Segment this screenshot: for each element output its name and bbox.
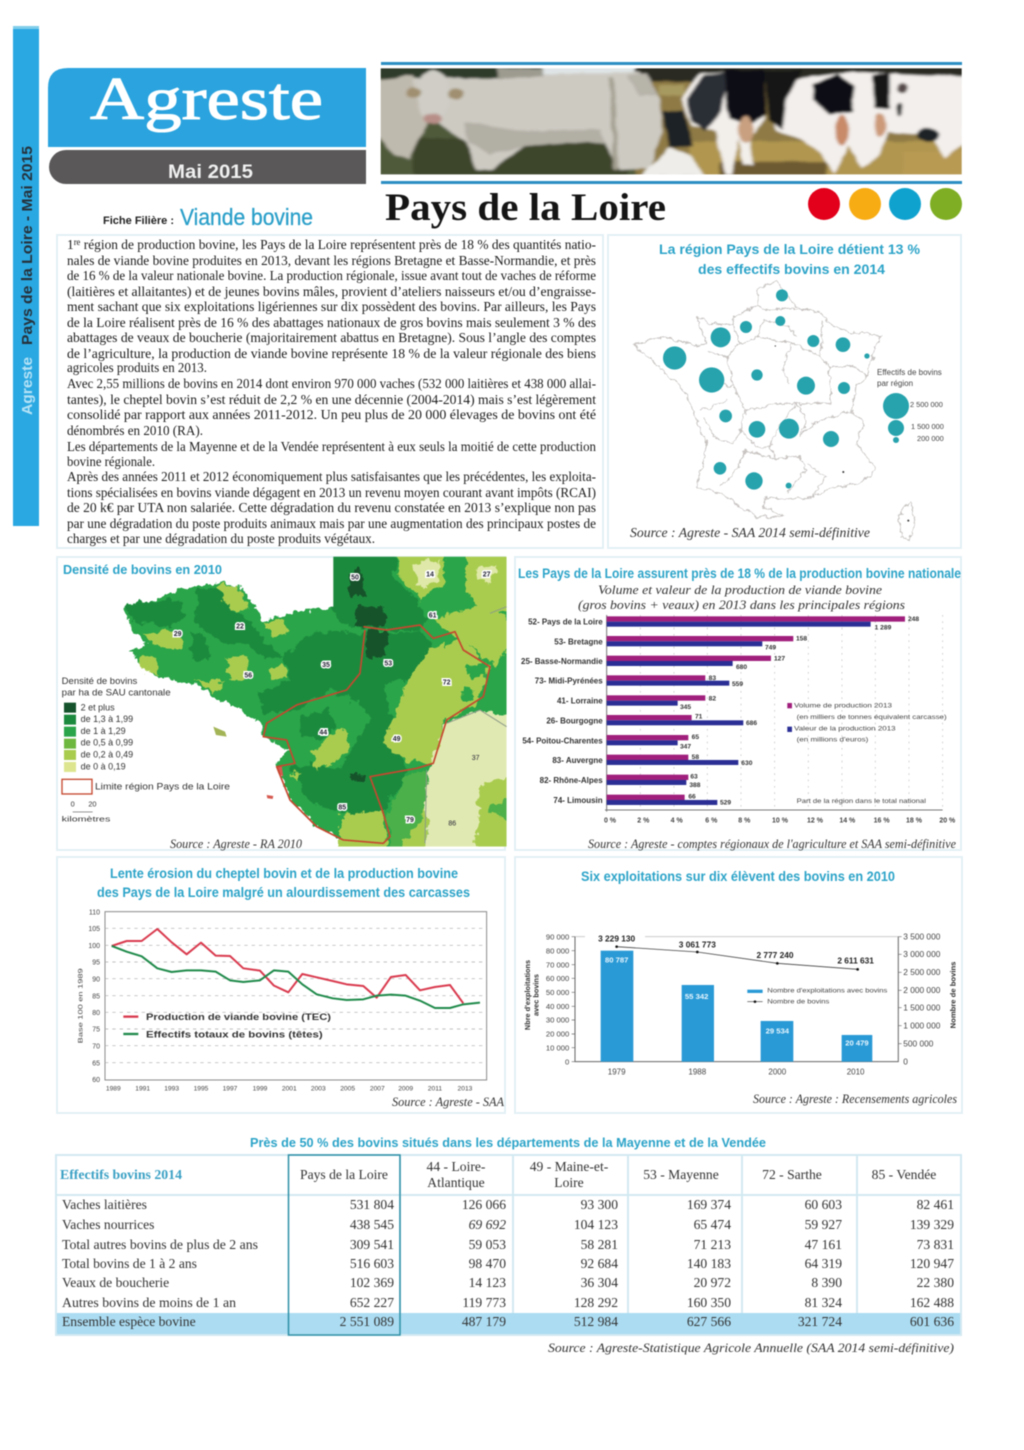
density choropleth map [122, 556, 508, 848]
bar and line chart: Nbre d'exploitations [523, 960, 532, 1030]
panel: introduction text: (laitières et allaitantes) et de jeunes bovins mâles, provient d’ateliers naisseurs et/ou d’engraisse- [67, 285, 596, 300]
bar chart heading [518, 566, 961, 612]
line chart: 80 [92, 1010, 100, 1017]
coloured dots [808, 188, 962, 220]
horizontal bar chart: 248 [908, 616, 919, 623]
panel: France map [608, 235, 961, 548]
horizontal bar chart: 630 [741, 760, 753, 767]
density legend: par ha de SAU cantonale [62, 688, 171, 698]
panel: introduction text: de la Loire réalisent près de 16 % des abattages nationaux de gros bovins mais seulement 3 % des [67, 316, 596, 331]
density legend: 0 [71, 800, 75, 809]
line chart: 2001 [282, 1086, 297, 1093]
density heading: Densité de bovins en 2010 [63, 562, 222, 577]
horizontal bar chart: 127 [774, 655, 785, 662]
bar and line chart [523, 931, 957, 1077]
horizontal bar chart: 18 % [906, 817, 923, 824]
table values: 162 488 [910, 1295, 954, 1310]
bar and line chart: 2 500 000 [903, 967, 941, 977]
horizontal bar chart: 71 [695, 713, 703, 720]
bar and line chart: 2 611 631 [837, 955, 874, 965]
bar chart source: Source : Agreste - comptes régionaux de l'agriculture et SAA semi-définitive [588, 837, 956, 851]
bar and line chart: Nombre de bovins [948, 962, 957, 1028]
France map heading: des effectifs bovins en 2014 [698, 261, 885, 277]
subtitle: fiche filière [103, 204, 313, 230]
line chart heading: Lente érosion du cheptel bovin et de la production bovine [110, 865, 458, 881]
combo chart source: Source : Agreste : Recensements agricoles [753, 1092, 957, 1106]
horizontal bar chart: 66 [688, 793, 696, 800]
panel: introduction text: charges et par une dégradation du poste produits végétaux. [67, 532, 375, 547]
bar and line chart: 80 000 [546, 946, 569, 955]
bar and line chart: 90 000 [546, 932, 569, 941]
panel: density map [56, 556, 508, 852]
density choropleth map: 22 [236, 624, 244, 631]
line chart: 65 [92, 1060, 100, 1067]
table values: 65 474 [694, 1217, 731, 1232]
date banner: Mai 2015 [168, 162, 253, 183]
table header row: Atlantique [427, 1175, 485, 1190]
density choropleth map: 14 [426, 572, 434, 579]
line chart: 2011 [428, 1086, 442, 1093]
density choropleth map: 49 [393, 736, 401, 743]
table values: 140 183 [687, 1256, 731, 1271]
bar and line chart: 2010 [847, 1068, 865, 1077]
highlighted column [288, 1155, 400, 1335]
line chart: 1993 [164, 1086, 179, 1093]
horizontal bar chart: 4 % [671, 817, 683, 824]
bar and line chart: 3 500 000 [903, 931, 941, 941]
line chart: 95 [92, 960, 100, 967]
panel: introduction text: de 20 k€ par UTA non salariée. Cette dégradation du revenu constatée en 2013 s’explique non pas [67, 501, 596, 516]
panel: introduction text: région de production bovine, les Pays de la Loire représentent près de 18 % des quantités natio- [80, 238, 596, 253]
line chart: 60 [92, 1077, 100, 1084]
line chart: Effectifs totaux de bovins (têtes) [146, 1029, 323, 1039]
table values: 59 053 [469, 1237, 506, 1252]
horizontal bar chart: 1 289 [875, 625, 892, 632]
table: effectifs bovins [56, 1155, 961, 1335]
table values: 126 066 [462, 1197, 506, 1212]
horizontal bar chart: 82 [709, 695, 716, 702]
density choropleth map: 35 [322, 662, 330, 669]
table values: 58 281 [581, 1237, 618, 1252]
line chart: 70 [92, 1043, 100, 1050]
France map heading [659, 241, 921, 277]
horizontal bar chart: 529 [720, 799, 731, 806]
horizontal bar chart: 65 [692, 734, 699, 741]
table values: 309 541 [350, 1237, 394, 1252]
density legend: de 0,2 à 0,49 [81, 749, 133, 759]
horizontal bar chart: 158 [796, 636, 807, 643]
line chart [77, 909, 487, 1093]
bar chart legend: Part de la région dans le total national [797, 798, 927, 805]
line chart: 90 [92, 976, 100, 983]
horizontal bar chart: 345 [680, 704, 691, 711]
table values: 487 179 [462, 1314, 506, 1329]
table header row: Loire [554, 1175, 584, 1190]
bar chart heading: Les Pays de la Loire assurent près de 18 % de la production bovine nationale [518, 566, 961, 581]
table values: 531 804 [350, 1197, 394, 1212]
density choropleth map: 86 [448, 820, 456, 827]
table values: 82 461 [917, 1197, 954, 1212]
density choropleth map: 85 [338, 804, 346, 811]
table values: 69 692 [469, 1217, 506, 1232]
table row labels: Total autres bovins de plus de 2 ans [62, 1237, 258, 1252]
horizontal bar chart: 41- Lorraine [557, 697, 603, 706]
panel: introduction text: dénombrés en 2010 (RA). [67, 424, 203, 439]
horizontal bar chart: 12 % [807, 817, 824, 824]
bar and line chart: 20 000 [546, 1030, 569, 1039]
table row labels: Veaux de boucherie [62, 1275, 169, 1290]
bar and line chart: 1988 [688, 1068, 707, 1077]
total row band [56, 1313, 961, 1335]
panel: introduction text: abattages de veaux de boucherie (majoritairement abattus en Bretagne). Sous l’angle des comptes [67, 331, 596, 346]
bar and line chart: 2 777 240 [756, 950, 794, 960]
table values [340, 1197, 954, 1329]
density legend: Densité de bovins [62, 676, 138, 686]
map legend [877, 368, 944, 443]
line chart: 1989 [106, 1086, 121, 1093]
table header row: 53 - Mayenne [643, 1167, 719, 1182]
line chart: 1999 [253, 1086, 268, 1093]
bar and line chart: 40 000 [546, 1002, 569, 1011]
horizontal bar chart: 63 [690, 773, 698, 780]
table values: 516 603 [350, 1256, 394, 1271]
table row labels: Ensemble espèce bovine [62, 1314, 196, 1329]
panel: introduction text: tions spécialisées en bovins viande dégagent en 2013 un revenu moyen courant avant impôts (RCAI) [67, 486, 596, 501]
bar and line chart: 1979 [608, 1068, 626, 1077]
horizontal bar chart: 347 [680, 743, 691, 750]
table values: 81 324 [805, 1295, 842, 1310]
density legend: de 0 à 0,19 [81, 762, 126, 772]
line chart: 100 [88, 943, 100, 950]
combo chart legend [747, 988, 888, 1006]
table values: 139 329 [910, 1217, 954, 1232]
density legend: Limite région Pays de la Loire [95, 782, 230, 792]
density choropleth map: 37 [472, 755, 480, 762]
France map heading: La région Pays de la Loire détient 13 % [659, 241, 921, 257]
density choropleth map: 27 [483, 572, 491, 579]
density legend: kilomètres [62, 815, 111, 824]
line chart: 2013 [458, 1086, 473, 1093]
panel: introduction text: de 16 % de la valeur nationale bovine. La production régionale, issue avant tout de vaches de réforme [67, 269, 596, 284]
side band [13, 26, 39, 526]
table values: 73 831 [917, 1237, 954, 1252]
bar chart heading: (gros bovins + veaux) en 2013 dans les principales régions [578, 597, 905, 612]
panel: introduction text: 1 [67, 238, 74, 253]
table row labels: Autres bovins de moins de 1 an [62, 1295, 236, 1310]
table values: 438 545 [350, 1217, 394, 1232]
horizontal bar chart: 25- Basse-Normandie [521, 657, 603, 666]
bar and line chart: 3 229 130 [598, 933, 636, 943]
line chart: 2009 [398, 1086, 413, 1093]
table values: 104 123 [574, 1217, 618, 1232]
table heading: Près de 50 % des bovins situés dans les départements de la Mayenne et de la Vendée [250, 1136, 766, 1150]
density legend: de 1 à 1,29 [81, 726, 126, 736]
combo chart legend: Nombre de bovins [767, 999, 830, 1006]
horizontal bar chart: 388 [689, 782, 701, 789]
horizontal bar chart: 14 % [839, 817, 856, 824]
table header row: Pays de la Loire [300, 1167, 388, 1182]
density source: Source : Agreste - RA 2010 [170, 836, 302, 851]
table values: 64 319 [805, 1256, 842, 1271]
bar and line chart: 60 000 [546, 974, 569, 983]
table values: 36 304 [581, 1275, 618, 1290]
horizontal bar chart: 686 [746, 720, 757, 727]
table values: 59 927 [805, 1217, 842, 1232]
subtitle: fiche filière: Fiche Filière : [103, 215, 174, 227]
line chart: 2007 [370, 1086, 385, 1093]
line chart: 1991 [135, 1086, 150, 1093]
horizontal bar chart: 53- Bretagne [554, 637, 603, 646]
bar and line chart: 0 [565, 1057, 569, 1066]
map legend: 200 000 [917, 434, 944, 443]
table values: 8 390 [811, 1275, 842, 1290]
logo: Agreste [48, 66, 366, 147]
table row labels [62, 1197, 258, 1329]
table values: 71 213 [694, 1237, 731, 1252]
combo chart legend: Nombre d'exploitations avec bovins [767, 988, 888, 995]
horizontal bar chart: 0 % [604, 817, 617, 824]
logo: Agreste: Agreste [90, 66, 323, 132]
line chart: Base 100 en 1989 [77, 968, 84, 1043]
line chart heading: des Pays de la Loire malgré un alourdissement des carcasses [97, 884, 470, 900]
horizontal bar chart [521, 615, 956, 824]
bar and line chart: 30 000 [546, 1016, 569, 1025]
side band: Agreste [19, 357, 36, 415]
panel: combo chart [515, 857, 962, 1113]
panel: introduction text [57, 235, 603, 548]
table values: 627 566 [687, 1314, 731, 1329]
horizontal bar chart: 8 % [738, 817, 751, 824]
map source: Source : Agreste - SAA 2014 semi-définitive [630, 525, 870, 540]
line chart heading [97, 865, 470, 900]
horizontal bar chart: 6 % [705, 817, 718, 824]
bar and line chart: 1 000 000 [903, 1020, 941, 1030]
bar chart legend: (en millions d'euros) [797, 737, 868, 744]
horizontal bar chart: 54- Poitou-Charentes [522, 736, 603, 745]
density choropleth map: 56 [244, 673, 252, 680]
map legend: par région [877, 379, 913, 388]
table source: Source : Agreste-Statistique Agricole Annuelle (SAA 2014 semi-définitive) [548, 1341, 954, 1355]
density choropleth map: 61 [429, 612, 437, 619]
table values: 128 292 [574, 1295, 618, 1310]
subtitle: fiche filière: Viande bovine [180, 204, 313, 230]
bar and line chart: 0 [903, 1056, 908, 1066]
side band: Pays de la Loire - Mai 2015 [19, 146, 36, 345]
header rules [381, 62, 962, 184]
panel: introduction text: nales de viande bovine produites en 2013, devant les régions Bretagne et Basse-Normandie, et près [67, 254, 596, 269]
horizontal bar chart: 20 % [939, 817, 956, 824]
horizontal bar chart: 16 % [874, 817, 890, 824]
table values: 652 227 [350, 1295, 394, 1310]
bar chart heading: Volume et valeur de la production de viande bovine [598, 582, 882, 597]
panel: line chart [57, 857, 505, 1113]
panel: introduction text: Avec 2,55 millions de bovins en 2014 dont environ 970 000 vaches (532 000 laitières et 438 000 allai- [67, 377, 596, 392]
table values: 169 374 [687, 1197, 731, 1212]
density choropleth map: 72 [443, 679, 451, 686]
photo: cattle [380, 68, 962, 176]
table values: 512 984 [574, 1314, 618, 1329]
panel: introduction text: tantes), le cheptel bovin s’est réduit de 2,2 % en une décennie (2004-2014) mais s’est légèrement [67, 393, 596, 408]
table values: 119 773 [462, 1295, 506, 1310]
table header row [60, 1159, 936, 1190]
table values: 47 161 [805, 1237, 842, 1252]
table row labels: Vaches laitières [62, 1197, 147, 1212]
panel: introduction text: Après des années 2011 et 2012 économiquement plus satisfaisantes que les précédentes, les exploita- [67, 470, 596, 485]
table values: 120 947 [910, 1256, 954, 1271]
map legend: Effectifs de bovins [877, 368, 942, 377]
table values: 160 350 [687, 1295, 731, 1310]
table values: 20 972 [694, 1275, 731, 1290]
panel: introduction text: agricoles produits en 2013. [67, 361, 207, 376]
line chart: 2005 [340, 1086, 355, 1093]
density choropleth map: 50 [351, 574, 359, 581]
bar and line chart: 500 000 [903, 1038, 934, 1048]
map legend: 2 500 000 [910, 400, 943, 409]
line chart: 110 [89, 909, 100, 916]
table values: 102 369 [350, 1275, 394, 1290]
table values: 93 300 [581, 1197, 618, 1212]
table row labels: Vaches nourrices [62, 1217, 154, 1232]
line chart: 105 [88, 926, 100, 933]
horizontal bar chart: 559 [732, 681, 743, 688]
density legend: de 0,5 à 0,99 [81, 738, 133, 748]
table values: 321 724 [798, 1314, 842, 1329]
bar and line chart: 55 342 [685, 992, 708, 1001]
table values: 14 123 [469, 1275, 506, 1290]
table values: 60 603 [805, 1197, 842, 1212]
panel: introduction text: de l’agriculture, la production de viande bovine représente 18 % de la valeur régionale des biens [67, 347, 596, 362]
map of France with circles [633, 282, 915, 540]
bar chart legend [787, 703, 947, 805]
table values: 2 551 089 [340, 1314, 394, 1329]
title: Pays de la Loire: Pays de la Loire [385, 186, 666, 229]
horizontal bar chart: 26- Bourgogne [546, 716, 603, 725]
table header row: 49 - Maine-et- [530, 1159, 609, 1174]
horizontal bar chart: 82- Rhône-Alpes [540, 776, 603, 785]
density choropleth map: 29 [174, 631, 182, 638]
table values: 92 684 [581, 1256, 618, 1271]
table header row: 85 - Vendée [872, 1167, 936, 1182]
panel: introduction text: Les départements de la Mayenne et de la Vendée représentent à eux seuls la moitié de cette production [67, 440, 596, 455]
density choropleth map: 53 [384, 660, 392, 667]
table values: 601 636 [910, 1314, 954, 1329]
table values: 98 470 [469, 1256, 506, 1271]
line chart: 2003 [311, 1086, 326, 1093]
bar chart legend: (en milliers de tonnes équivalent carcasse) [797, 714, 947, 721]
horizontal bar chart: 83- Auvergne [552, 756, 603, 765]
bar and line chart: 10 000 [546, 1043, 569, 1052]
density legend [62, 676, 230, 824]
bar and line chart: 3 000 000 [903, 949, 941, 959]
bar and line chart: 80 787 [605, 956, 628, 965]
table header row: Effectifs bovins 2014 [60, 1167, 182, 1182]
horizontal bar chart: 74- Limousin [553, 796, 603, 805]
panel: introduction text: par une dégradation du poste produits animaux mais par une augmentation des principaux postes de [67, 517, 596, 532]
line chart source: Source : Agreste - SAA [392, 1095, 504, 1109]
horizontal bar chart: 680 [736, 664, 747, 671]
bar and line chart: 50 000 [546, 988, 569, 997]
density legend: de 1,3 à 1,99 [81, 714, 133, 724]
panel: introduction text: bovine régionale. [67, 455, 155, 470]
density legend: 20 [88, 800, 96, 809]
density choropleth map: 79 [406, 817, 414, 824]
panel: introduction text: re [74, 237, 80, 247]
horizontal bar chart: 83 [709, 675, 716, 682]
horizontal bar chart: 2 % [637, 817, 650, 824]
bar chart legend: Valeur de la production 2013 [794, 726, 896, 733]
panel: introduction text: consolidé par rapport aux années 2011-2012. Un peu plus de 20 000 élevages de bovins ont été [67, 408, 596, 423]
density choropleth map: 44 [319, 729, 327, 736]
bar and line chart: 2000 [768, 1068, 787, 1077]
date banner [49, 150, 366, 184]
bar and line chart: 20 479 [845, 1039, 869, 1048]
panel: bar chart regions [515, 557, 961, 851]
table header row: 72 - Sarthe [762, 1167, 822, 1182]
line chart: 75 [92, 1027, 100, 1034]
bar chart legend: Volume de production 2013 [794, 703, 892, 710]
bar and line chart: 3 061 773 [679, 940, 716, 950]
horizontal bar chart: 58 [692, 754, 699, 761]
bar and line chart: 70 000 [546, 960, 569, 969]
panel: introduction text: ment sachant que six exploitations ligériennes sur dix possèdent des bovins. Par ailleurs, les Pays [67, 300, 596, 315]
map legend: 1 500 000 [911, 422, 944, 431]
table row labels: Total bovins de 1 à 2 ans [62, 1256, 197, 1271]
density legend: 2 et plus [81, 703, 115, 713]
line chart: 1995 [194, 1086, 209, 1093]
table values: 22 380 [917, 1275, 954, 1290]
line chart: Production de viande bovine (TEC) [146, 1012, 331, 1022]
horizontal bar chart: 52- Pays de la Loire [528, 618, 603, 627]
bar and line chart: 2 000 000 [903, 985, 941, 995]
bar and line chart: 1 500 000 [903, 1002, 941, 1012]
horizontal bar chart: 73- Midi-Pyrénées [535, 677, 603, 686]
table header row: 44 - Loire- [427, 1159, 486, 1174]
horizontal bar chart: 10 % [772, 817, 789, 824]
line chart: 85 [92, 993, 100, 1000]
bar and line chart: avec bovins [531, 974, 540, 1016]
horizontal bar chart: 749 [765, 645, 776, 652]
combo chart heading: Six exploitations sur dix élèvent des bovins en 2010 [581, 868, 895, 884]
line chart: 1997 [223, 1086, 238, 1093]
bar and line chart: 29 534 [766, 1026, 790, 1035]
